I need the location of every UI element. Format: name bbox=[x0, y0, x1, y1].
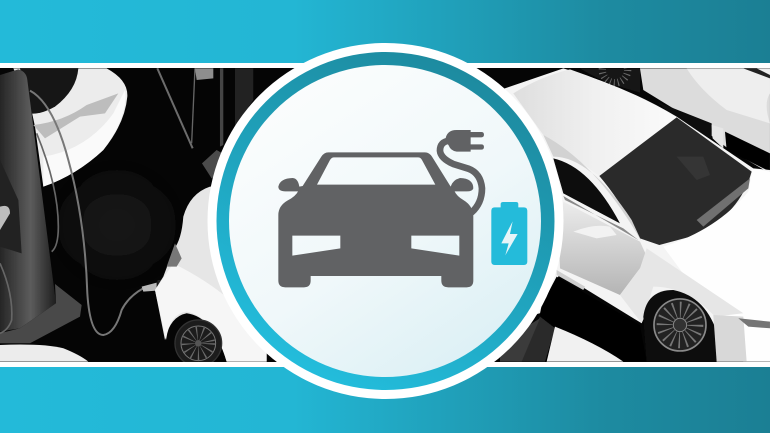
bottom teal band bbox=[0, 367, 770, 433]
roof bbox=[514, 69, 608, 157]
charging cable bbox=[30, 91, 143, 335]
photo strip: electric cars charging bbox=[0, 57, 770, 367]
icon: battery bbox=[491, 202, 527, 265]
front wheel bbox=[175, 320, 222, 367]
main front wheel bbox=[643, 290, 718, 362]
right photo: white sports cars bbox=[500, 57, 770, 362]
side windows bbox=[553, 158, 620, 223]
icon: electric car with plug and battery bbox=[278, 130, 527, 287]
left photo: charging station and cars bbox=[0, 68, 267, 367]
icon: plug bbox=[445, 130, 484, 152]
front fender bbox=[620, 248, 743, 323]
central badge bbox=[208, 43, 564, 399]
main white car body bbox=[500, 68, 770, 362]
lower second car bbox=[522, 316, 554, 362]
hood bbox=[663, 168, 770, 362]
background wheel bbox=[580, 68, 640, 93]
charging post bbox=[0, 69, 56, 332]
other cables and stands bbox=[157, 68, 193, 148]
parked car bumper, bottom left bbox=[0, 345, 88, 362]
badge teal ring bbox=[216, 52, 554, 390]
icon: car bbox=[278, 152, 473, 287]
windshield bbox=[599, 117, 752, 245]
post base bbox=[0, 284, 82, 343]
floor glow bbox=[83, 194, 151, 256]
icon: charging cable bbox=[440, 141, 482, 213]
badge white outer circle bbox=[208, 43, 564, 399]
background car, top right bbox=[640, 68, 770, 173]
bumper and headlight bbox=[713, 315, 747, 362]
side door bbox=[560, 202, 650, 295]
lower black gap bbox=[540, 276, 558, 313]
top teal band bbox=[0, 0, 770, 63]
mirror bbox=[573, 226, 617, 238]
badge inner disc bbox=[229, 65, 541, 377]
side pillar bbox=[543, 135, 642, 242]
parked white car, top left bbox=[13, 68, 127, 187]
plug bbox=[142, 283, 157, 292]
white car being charged bbox=[155, 187, 267, 362]
